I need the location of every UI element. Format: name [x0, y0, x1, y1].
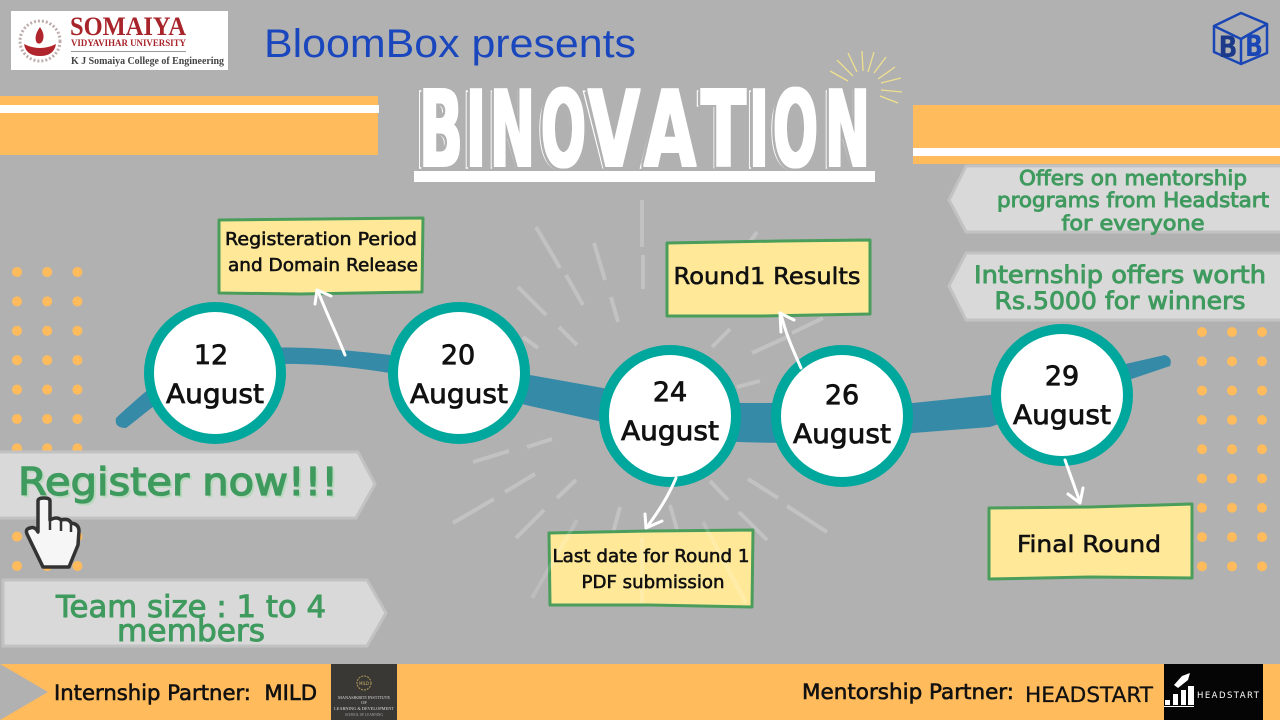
- title: BINOVATION: B: [414, 71, 460, 193]
- arrow: 12 August to registration: [315, 290, 345, 355]
- logo: MILD: OF: [361, 700, 367, 705]
- banner: register now: Register now!!!: [18, 460, 338, 504]
- banner: offers on mentorship: Offers on mentorship: [1019, 166, 1247, 190]
- sparkle: [830, 51, 902, 103]
- title: BINOVATION: [414, 69, 875, 193]
- logo: HEADSTART: [1164, 664, 1263, 720]
- banner: team size: Team size : 1 to 4: [55, 590, 326, 625]
- title: BINOVATION: N: [821, 71, 868, 193]
- arrow: 24 August to last date: [645, 478, 676, 528]
- title: BINOVATION: B: [419, 69, 463, 191]
- date: 26 August: August: [793, 419, 891, 450]
- logo: Somaiya: K J Somaiya College of Engineering: [71, 56, 224, 67]
- title: BINOVATION: I: [466, 69, 486, 191]
- date: 20 August: [393, 307, 525, 439]
- title: BINOVATION: N: [490, 69, 535, 191]
- callout: round 1 results: [667, 240, 870, 316]
- logo: Somaiya: [11, 11, 228, 70]
- partner name: HEADSTART: HEADSTART: [1025, 683, 1153, 707]
- title: BINOVATION: T: [697, 71, 744, 193]
- title: BINOVATION: O: [773, 69, 818, 191]
- callout: last date: Last date for Round 1: [552, 546, 750, 567]
- title: BINOVATION: N: [486, 71, 533, 193]
- callout: round 1 results: Round1 Results: [674, 264, 860, 290]
- logo: MILD: SCHOOL OF LEARNING: [345, 712, 383, 717]
- logo: HEADSTART: HEADSTART: [1197, 691, 1260, 701]
- heading: BloomBox presents: BloomBox presents: [264, 22, 636, 66]
- title: BINOVATION: V: [583, 71, 639, 193]
- banner: offers on mentorship: [949, 166, 1280, 235]
- banner: register now: Register now!!!: [20, 462, 340, 506]
- title: BINOVATION: O: [537, 71, 584, 193]
- decorative dots: right: [1187, 317, 1277, 581]
- banner: team size: [3, 580, 386, 649]
- title: BINOVATION: I: [461, 71, 482, 193]
- date: 29 August: [996, 329, 1128, 461]
- left orange band: [0, 96, 379, 155]
- logo: BloomBox cube: [1214, 13, 1267, 64]
- callout: registration: Registeration Period: [225, 229, 417, 250]
- banner: offers on mentorship: programs from Headstart: [997, 188, 1269, 212]
- internship partner: Internship Partner: MILD: [54, 681, 317, 705]
- date: 12 August: August: [166, 379, 264, 410]
- callout: last date: [532, 520, 753, 607]
- banner: register now: [0, 452, 375, 518]
- title: BINOVATION: O: [541, 69, 586, 191]
- footer bar: [0, 664, 1280, 720]
- logo: BloomBox cube: B: [1218, 30, 1238, 64]
- title: BINOVATION: A: [644, 69, 696, 191]
- date: 12 August: 12: [194, 340, 228, 371]
- logo: MILD: MILD: [359, 681, 369, 686]
- banner: internship offers: [949, 253, 1280, 320]
- icon: hand cursor: [26, 498, 79, 567]
- mentorship partner: Mentorship Partner:: [802, 680, 1014, 704]
- logo: Somaiya: VIDYAVIHAR UNIVERSITY: [71, 39, 186, 49]
- date: 20 August: 20: [441, 340, 475, 371]
- arrow: 26 August to round 1 results: [780, 313, 801, 368]
- callout: registration: [219, 218, 423, 294]
- banner: team size: members: [117, 614, 265, 649]
- banner: internship offers: Rs.5000 for winners: [994, 287, 1246, 315]
- title: BINOVATION: A: [640, 71, 695, 193]
- logo: MILD: [331, 664, 397, 720]
- logo: MILD: LEARNING & DEVELOPMENT: [334, 706, 394, 711]
- date: 24 August: [604, 350, 736, 482]
- banner: internship offers: Internship offers worth: [974, 261, 1266, 289]
- logo: BloomBox cube: B: [1245, 29, 1263, 63]
- callout: last date: PDF submission: [582, 572, 724, 593]
- date: 26 August: 26: [825, 380, 859, 411]
- date: 24 August: August: [621, 416, 719, 447]
- burst: [453, 200, 827, 540]
- date: 29 August: August: [1013, 400, 1111, 431]
- timeline ribbon: [116, 347, 1171, 443]
- banner: offers on mentorship: for everyone: [1062, 211, 1204, 235]
- right orange band: [913, 105, 1280, 164]
- callout: final round: Final Round: [1017, 532, 1161, 558]
- callout: final round: [989, 504, 1192, 579]
- date: 24 August: 24: [653, 377, 687, 408]
- arrow: 29 August to final round: [1065, 460, 1083, 503]
- title: BINOVATION: O: [769, 71, 816, 193]
- callout: registration: and Domain Release: [228, 255, 418, 276]
- title: BINOVATION: I: [744, 71, 766, 193]
- date: 12 August: [149, 307, 281, 439]
- title: BINOVATION: N: [825, 69, 870, 191]
- logo: MILD: MANASIKRITI INSTITUTE: [338, 695, 390, 700]
- date: 26 August: [776, 350, 908, 482]
- decorative dots: left: [2, 257, 93, 581]
- date: 20 August: August: [410, 379, 508, 410]
- date: 29 August: 29: [1045, 361, 1079, 392]
- title: BINOVATION: T: [701, 69, 746, 191]
- logo: Somaiya: SOMAIYA: [70, 12, 186, 41]
- title: BINOVATION: I: [749, 69, 769, 191]
- title: BINOVATION: V: [588, 69, 640, 191]
